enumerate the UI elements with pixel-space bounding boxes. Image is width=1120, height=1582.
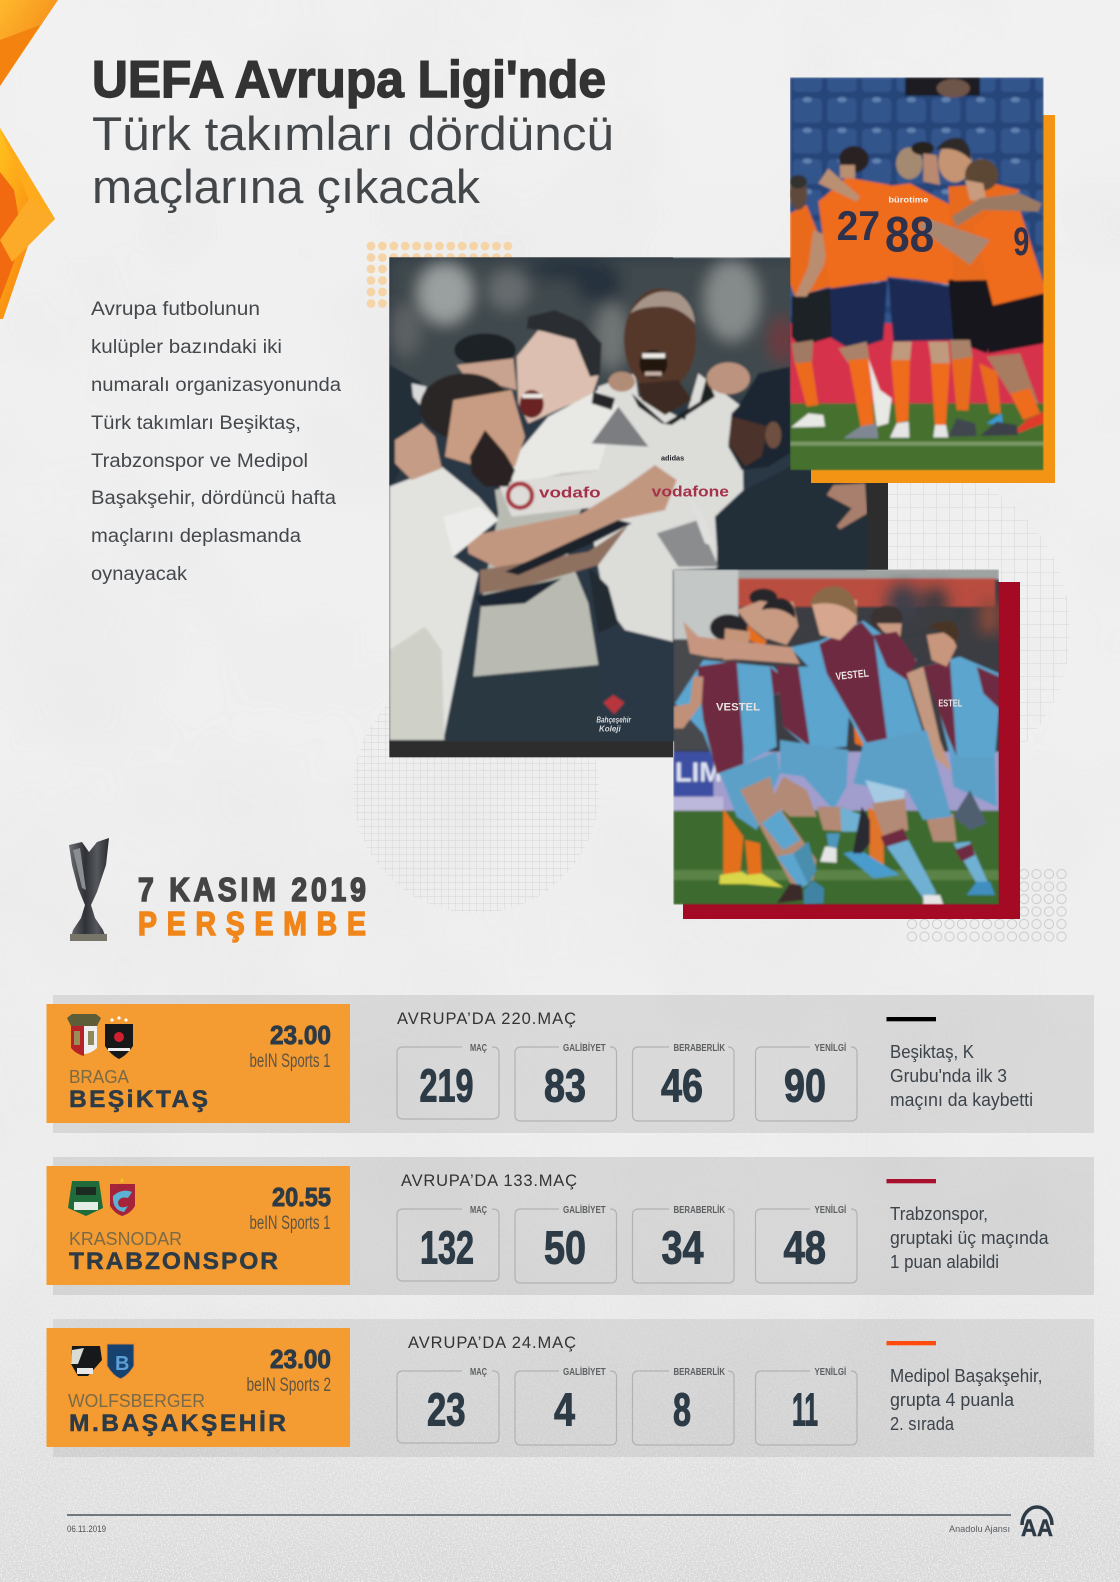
row: Braga - Beşiktaş: [46, 995, 1094, 1133]
red frame: [683, 582, 1020, 919]
stat: galibiyet: GALİBİYET: [563, 1203, 606, 1216]
note: [886, 1341, 1042, 1434]
decorative star top-left: [0, 0, 58, 319]
stat: beraberlik: BERABERLİK: [674, 1041, 726, 1054]
icon: Başakşehir crest: B: [115, 1353, 129, 1375]
stat: galibiyet: [515, 1041, 616, 1121]
intro paragraph: maçlarını deplasmanda: [91, 526, 301, 547]
photo panel: Beşiktaş celebration: vodafo: [539, 485, 601, 501]
icon: Wolfsberger crest: [71, 1346, 102, 1376]
team names: WOLFSBERGER: [68, 1391, 205, 1411]
note: Trabzonspor,: [890, 1204, 988, 1224]
note: 2. sırada: [890, 1414, 955, 1434]
European match count: AVRUPA’DA 24.MAÇ: [408, 1334, 576, 1352]
photo panel: Beşiktaş celebration: Koleji: [599, 724, 622, 733]
stat: beraberlik: 34: [662, 1222, 704, 1274]
stat: maç: [397, 1205, 499, 1281]
note: Beşiktaş, K: [890, 1042, 974, 1062]
photo panel: Başakşehir team: bürotime: [888, 195, 929, 205]
stat: maç: 23: [427, 1384, 466, 1436]
row: Krasnodar - Trabzonspor: [46, 1157, 1094, 1295]
stat: beraberlik: BERABERLİK: [674, 1203, 726, 1216]
stat: beraberlik: [632, 1365, 734, 1445]
kickoff and channel: [246, 1344, 331, 1396]
stat: maç: MAÇ: [470, 1205, 487, 1216]
note: Medipol Başakşehir,: [890, 1366, 1042, 1386]
intro paragraph: oynayacak: [91, 564, 188, 585]
note: gruptaki üç maçında: [890, 1228, 1049, 1248]
team names: [69, 1229, 278, 1275]
note: [886, 1017, 1033, 1110]
kickoff and channel: beIN Sports 1: [250, 1051, 330, 1072]
icon: Anadolu Ajansı logo: AA: [1021, 1515, 1053, 1542]
kickoff and channel: 23.00: [270, 1020, 331, 1050]
stat: yenilgi: YENİLGİ: [814, 1365, 846, 1378]
team names: KRASNODAR: [69, 1229, 182, 1249]
stat: maç: 132: [420, 1222, 474, 1274]
photo panel: Başakşehir team: 88: [885, 207, 934, 263]
note: grupta 4 puanla: [890, 1390, 1015, 1410]
stat: yenilgi: 11: [792, 1384, 818, 1436]
note: maçını da kaybetti: [890, 1090, 1033, 1110]
stat: galibiyet: [515, 1203, 616, 1283]
kickoff and channel: beIN Sports 2: [246, 1375, 331, 1396]
intro paragraph: Trabzonspor ve Medipol: [91, 451, 308, 472]
title: UEFA Avrupa Ligi'nde: [92, 51, 606, 109]
stat: galibiyet: 50: [544, 1222, 586, 1274]
date: 06.11.2019: [67, 1524, 106, 1535]
stat: maç: [397, 1367, 499, 1443]
photo panel: Trabzonspor team: VESTEL: [835, 668, 870, 683]
icon: Beşiktaş crest: [105, 1016, 133, 1059]
photo panel: Trabzonspor team: [673, 569, 1020, 919]
stat: yenilgi: [756, 1041, 857, 1121]
icon: Başakşehir crest: [107, 1344, 134, 1379]
stat: yenilgi: [756, 1365, 857, 1445]
row background: [53, 1319, 1094, 1457]
stat: beraberlik: BERABERLİK: [674, 1365, 726, 1378]
note: 1 puan alabildi: [890, 1252, 999, 1272]
match card: [46, 1166, 350, 1285]
note: [886, 1179, 1049, 1272]
orange frame: [811, 115, 1055, 483]
row background: [53, 1157, 1094, 1295]
intro paragraph: Başakşehir, dördüncü hafta: [91, 488, 336, 509]
date heading: PERŞEMBE: [138, 905, 366, 943]
photo panel: Trabzonspor team: LIM: [675, 757, 722, 788]
kickoff and channel: [250, 1182, 331, 1234]
stat: maç: [397, 1043, 499, 1119]
stat: beraberlik: [632, 1203, 734, 1283]
intro paragraph: kulüpler bazındaki iki: [91, 337, 282, 358]
team names: TRABZONSPOR: [69, 1248, 278, 1275]
stat: beraberlik: 46: [661, 1060, 703, 1112]
photo panel: Başakşehir team: [789, 77, 1055, 483]
icon: Krasnodar crest: [68, 1181, 103, 1216]
stat: yenilgi: 90: [784, 1060, 826, 1112]
photo panel: Başakşehir team: 27: [837, 202, 880, 249]
team names: M.BAŞAKŞEHİR: [69, 1410, 286, 1437]
photo panel: Beşiktaş celebration: Bahçeşehir: [596, 716, 632, 725]
stat: maç: 219: [420, 1060, 474, 1112]
row: Wolfsberger - Medipol Başakşehir: [46, 1319, 1094, 1457]
decor: outlined circles: [907, 869, 1066, 941]
stat: galibiyet: GALİBİYET: [563, 1365, 606, 1378]
date heading: [138, 871, 366, 943]
stat: galibiyet: GALİBİYET: [563, 1041, 606, 1054]
photo panel: Trabzonspor team: ESTEL: [938, 699, 962, 710]
icon: Trabzonspor crest: [110, 1177, 135, 1216]
decor: grid circles: [353, 465, 1070, 913]
intro paragraph: Avrupa futbolunun: [91, 299, 260, 320]
date heading: 7 KASIM 2019: [138, 871, 366, 909]
intro paragraph: Türk takımları Beşiktaş,: [91, 413, 301, 434]
note: Grubu'nda ilk 3: [890, 1066, 1007, 1086]
photo panel: Trabzonspor team: VESTEL: [716, 702, 760, 714]
footer: [67, 1507, 1053, 1542]
photo panel: Beşiktaş celebration: [388, 257, 888, 757]
photo panel: Beşiktaş celebration: adidas: [661, 454, 684, 463]
match card: [46, 1328, 350, 1447]
European match count: AVRUPA’DA 133.MAÇ: [401, 1172, 577, 1190]
stat: beraberlik: 8: [673, 1384, 691, 1436]
stat: galibiyet: [515, 1365, 616, 1445]
title: maçlarına çıkacak: [92, 160, 481, 213]
match card: [46, 1004, 350, 1123]
team names: BEŞiKTAŞ: [69, 1086, 208, 1113]
kickoff and channel: beIN Sports 1: [250, 1213, 330, 1234]
stat: beraberlik: [632, 1041, 734, 1121]
stat: maç: MAÇ: [470, 1367, 487, 1378]
title: Türk takımları dördüncü: [92, 107, 614, 160]
decor: orange dots: [367, 242, 512, 308]
photo panel: Başakşehir team: 9: [1013, 220, 1029, 264]
intro paragraph: numaralı organizasyonunda: [91, 375, 341, 396]
icon: Europa League trophy: [69, 838, 109, 941]
kickoff and channel: 20.55: [272, 1182, 331, 1212]
kickoff and channel: 23.00: [270, 1344, 331, 1374]
stat: galibiyet: 4: [554, 1384, 575, 1436]
stat: yenilgi: 48: [784, 1222, 826, 1274]
European match count: AVRUPA’DA 220.MAÇ: [397, 1010, 576, 1028]
intro paragraph: [91, 299, 341, 585]
stat: yenilgi: YENİLGİ: [814, 1041, 846, 1054]
row background: [53, 995, 1094, 1133]
icon: Braga crest: [67, 1014, 101, 1056]
stat: galibiyet: 83: [544, 1060, 586, 1112]
team names: [68, 1391, 286, 1437]
team names: BRAGA: [69, 1067, 129, 1087]
photo panel: Beşiktaş celebration: vodafone: [652, 485, 729, 501]
stat: yenilgi: YENİLGİ: [814, 1203, 846, 1216]
stat: yenilgi: [756, 1203, 857, 1283]
kickoff and channel: [250, 1020, 331, 1072]
title: [92, 51, 614, 213]
background: [0, 1295, 1120, 1582]
agency name: Anadolu Ajansı: [949, 1524, 1010, 1535]
stat: maç: MAÇ: [470, 1043, 487, 1054]
team names: [69, 1067, 208, 1113]
